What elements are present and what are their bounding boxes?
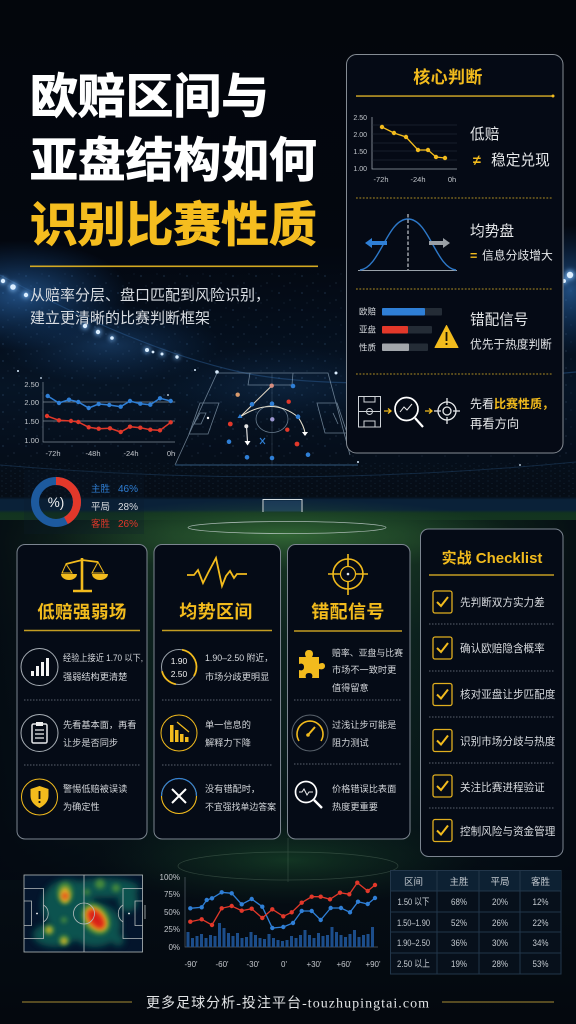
odds range table (390, 870, 561, 974)
checklist item 1 (433, 591, 545, 613)
checklist item 6: 控制风险与资金管理 (460, 825, 556, 838)
low odds text (470, 126, 550, 169)
mismatch bars (359, 306, 442, 352)
odds movement line chart: 1.00 (24, 436, 39, 445)
checklist item 2 (433, 637, 545, 659)
row: puzzle: 市场不一致时更 (332, 664, 396, 675)
icon: target (328, 554, 368, 595)
outcome donut chart (24, 470, 144, 534)
checklist item 6 (433, 820, 556, 842)
outcome donut chart: 客胜 (91, 518, 111, 530)
panel heading: 核心判断 (413, 67, 483, 87)
row: range: 1.90 (171, 656, 188, 666)
outcome donut chart: 26% (118, 519, 138, 530)
match timeline chart: -30' (246, 960, 260, 969)
odds movement line chart: -48h (85, 449, 101, 458)
checklist item 4: 识别市场分歧与热度 (460, 735, 556, 748)
odds range table: 1.90–2.50 (397, 938, 430, 949)
bell curve (358, 214, 457, 270)
mismatch text: 优先于热度判断 (470, 338, 552, 352)
row: caution: 为确定性 (63, 801, 100, 812)
final judgement text: 再看方向 (470, 416, 519, 431)
odds movement line chart: 2.00 (24, 398, 39, 407)
odds movement line chart: -72h (45, 449, 61, 458)
goal and centre circle (188, 500, 386, 534)
odds movement line chart: 0h (167, 449, 175, 458)
tactical pitch diagram (175, 373, 358, 465)
row: fundamentals (21, 714, 136, 752)
balanced line text (470, 222, 553, 263)
balanced line text: 均势盘 (470, 222, 514, 240)
heatmap (24, 875, 145, 952)
icon: scales (61, 558, 108, 591)
row: no mismatch: 没有错配时， (205, 783, 260, 794)
card: low odds matches (17, 544, 147, 839)
footer: 更多足球分析-投注平台-touzhupingtai.com (146, 994, 429, 1012)
subtitle: 从赔率分层、盘口匹配到风险识别， (30, 286, 270, 304)
odds range table: 28% (492, 959, 508, 970)
row: experience: 强弱结构更清楚 (63, 671, 127, 682)
odds range table: 36% (451, 938, 467, 949)
row: no mismatch: 不宜强找单边答案 (205, 801, 276, 812)
low odds chart: 2.00 (353, 132, 367, 139)
card: balanced range (154, 544, 280, 839)
outcome donut chart: 平局 (91, 502, 110, 513)
odds range table: 12% (532, 897, 549, 908)
heading rule (356, 94, 554, 98)
flow icons (358, 396, 460, 427)
match timeline chart: 100% (160, 873, 180, 882)
subtitle: 建立更清晰的比赛判断框架 (30, 310, 210, 327)
stadium light glows (0, 270, 575, 360)
odds range table: 19% (451, 959, 467, 970)
odds range table: 2.50 以上 (397, 959, 430, 970)
row: no mismatch (162, 778, 276, 814)
low odds chart: 1.00 (353, 166, 367, 173)
match timeline chart: +90' (365, 960, 381, 969)
odds range table: 平局 (490, 877, 510, 888)
mismatch text (470, 312, 552, 352)
odds movement line chart: -24h (123, 449, 139, 458)
title: 欧赔区间与 (30, 71, 269, 124)
outcome donut chart: 28% (118, 502, 138, 513)
low odds text: 稳定兑现 (491, 152, 550, 169)
subtitle (30, 286, 270, 327)
match timeline chart (160, 873, 381, 969)
outcome donut chart: %) (48, 495, 64, 510)
odds range table: 53% (532, 959, 549, 970)
row: magnifier: 热度更重要 (332, 801, 378, 812)
match timeline chart: -90' (184, 960, 198, 969)
row: caution: 警惕低赔被误读 (63, 783, 127, 794)
match timeline chart: 0% (168, 943, 180, 952)
row: magnifier (296, 782, 396, 812)
odds range table: 主胜 (449, 876, 469, 888)
odds movement line chart: 1.50 (24, 417, 39, 426)
checklist panel (420, 529, 563, 856)
row: single information: 单一信息的 (205, 719, 251, 730)
odds range table: 1.50–1.90 (397, 918, 430, 929)
outcome donut chart: 46% (118, 484, 138, 495)
row: single information: 解释力下降 (205, 737, 251, 748)
match timeline chart: 0' (281, 960, 287, 969)
checklist heading: 实战 Checklist (442, 549, 542, 567)
row: fundamentals: 让步是否同步 (63, 738, 118, 748)
final judgement text (470, 396, 554, 431)
checklist item 2: 确认欧赔隐含概率 (460, 642, 545, 655)
row: caution (22, 779, 127, 815)
balanced line text: 信息分歧增大 (482, 248, 553, 262)
card heading: 均势区间 (179, 602, 253, 622)
title (30, 71, 317, 252)
checklist item 4 (433, 730, 556, 752)
row: magnifier: 价格错误比表面 (332, 783, 396, 794)
row: puzzle: 值得留意 (332, 682, 369, 693)
checklist item 3: 核对亚盘让步匹配度 (460, 688, 556, 701)
low odds chart: 2.50 (353, 115, 367, 122)
checklist item 5 (433, 775, 545, 797)
mismatch bars: 性质 (359, 342, 377, 352)
low odds chart: 0h (448, 175, 456, 184)
match timeline chart: -60' (215, 960, 229, 969)
low odds chart (353, 115, 457, 184)
odds range table: 区间 (404, 876, 423, 888)
odds range table: 1.50 以下 (398, 897, 430, 908)
low odds text: 低赔 (470, 126, 500, 143)
low odds text: ≠ (473, 153, 481, 169)
odds movement line chart (24, 380, 175, 458)
match timeline chart: +30' (306, 960, 322, 969)
low odds chart: -72h (373, 175, 389, 184)
row: experience: 经验上接近 1.70 以下, (63, 652, 143, 663)
title: 亚盘结构如何 (30, 135, 317, 188)
row: range (159, 647, 273, 687)
icon: warning triangle (435, 326, 458, 348)
row: single information (161, 715, 251, 751)
row: gauge: 过浅让步可能是 (332, 719, 396, 730)
icon: waveform (187, 558, 247, 586)
odds range table: 52% (451, 918, 467, 929)
low odds chart: 1.50 (353, 149, 367, 156)
mismatch bars: 亚盘 (359, 324, 377, 334)
card heading: 低赔强弱场 (37, 602, 127, 622)
row: range: 2.50 (171, 669, 188, 679)
checklist item 3 (433, 684, 556, 706)
title: 识别比赛性质 (30, 200, 317, 252)
bottom pitch markings (178, 838, 398, 882)
mismatch text: 错配信号 (470, 312, 528, 328)
row: puzzle: 赔率、亚盘与比赛 (332, 647, 403, 658)
odds range table: 68% (451, 897, 467, 908)
panel: core judgement (346, 54, 563, 453)
outcome donut chart: 主胜 (91, 483, 111, 495)
row: puzzle (299, 647, 403, 693)
final judgement text: 先看比赛性质， (470, 396, 554, 411)
row: gauge: 阻力测试 (332, 737, 369, 748)
match timeline chart: 50% (164, 908, 180, 917)
odds range table: 20% (492, 897, 508, 908)
title rule (30, 266, 318, 267)
checklist item 1: 先判断双方实力差 (460, 596, 545, 609)
row: fundamentals: 先看基本面，再看 (63, 719, 136, 730)
odds range table: 22% (532, 918, 549, 929)
match timeline chart: +60' (336, 960, 352, 969)
card: mismatch signal (288, 544, 410, 839)
low odds chart: -24h (410, 175, 426, 184)
row: experience (21, 648, 143, 686)
odds range table: 客胜 (531, 876, 550, 888)
balanced line text: = (470, 249, 477, 263)
odds range table: 34% (532, 938, 549, 949)
mismatch bars: 欧赔 (359, 306, 377, 316)
row: gauge (292, 715, 396, 751)
odds range table: 30% (492, 938, 508, 949)
match timeline chart: 25% (164, 925, 180, 934)
card heading: 错配信号 (311, 602, 385, 622)
odds movement line chart: 2.50 (24, 380, 39, 389)
match timeline chart: 75% (164, 890, 180, 899)
odds range table: 26% (492, 918, 508, 929)
row: range: 市场分歧更明显 (205, 671, 269, 682)
row: range: 1.90–2.50 附近， (205, 652, 273, 663)
checklist item 5: 关注比赛进程验证 (460, 781, 545, 794)
